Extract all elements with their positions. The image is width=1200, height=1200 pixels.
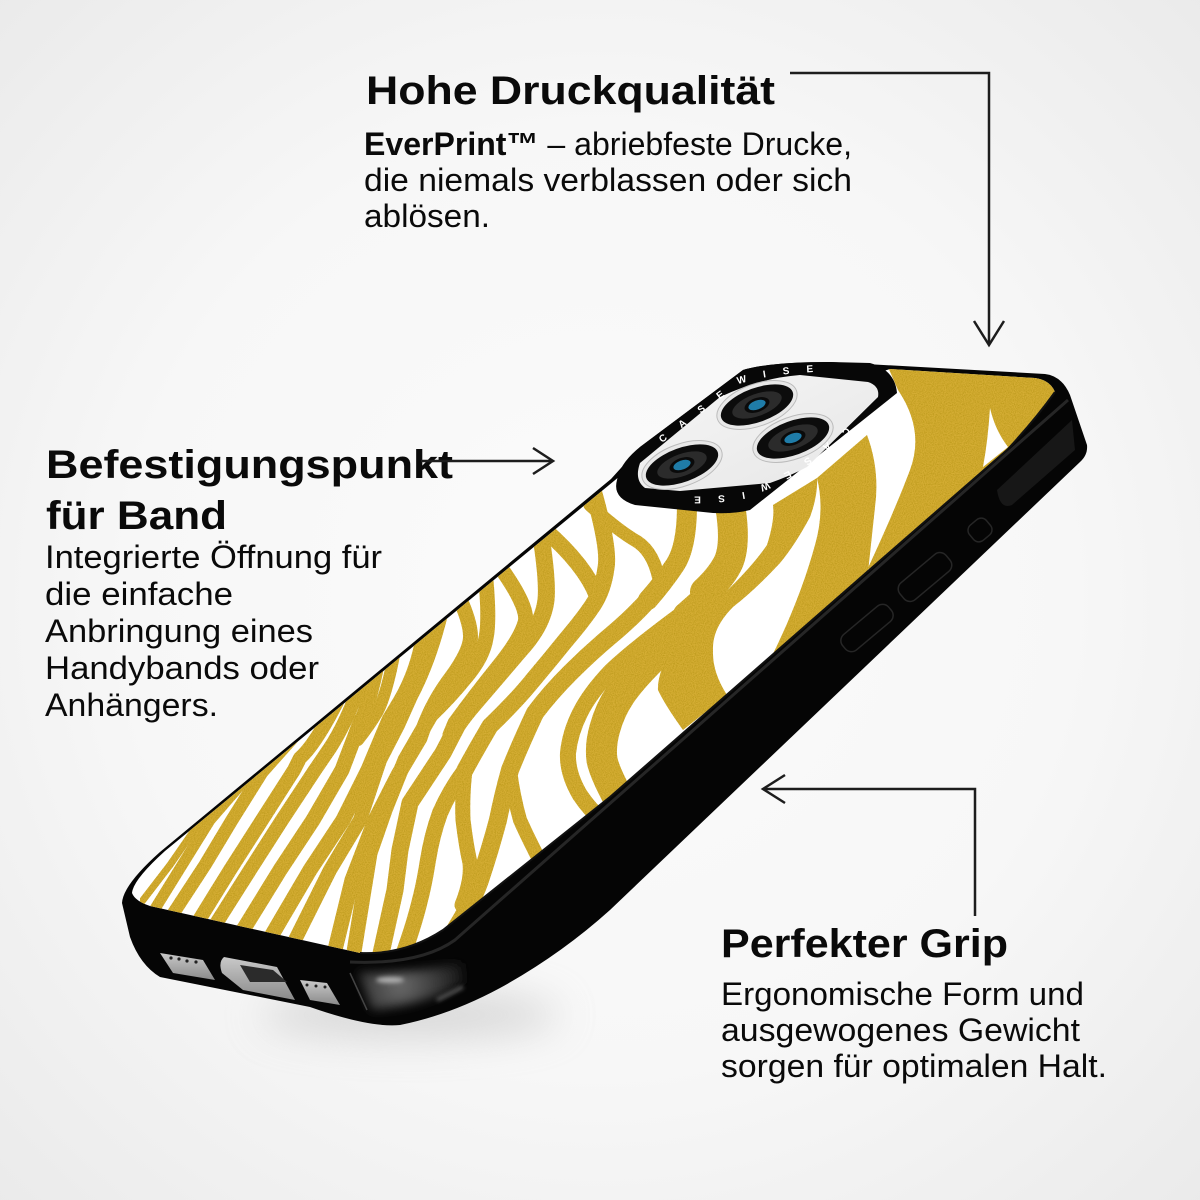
heading: Befestigungspunkt für Band [46, 443, 453, 538]
arrow: to strap attachment point [421, 448, 553, 474]
arrow: to case side [763, 775, 975, 916]
brand ring text: CASEWISE [659, 365, 813, 442]
text block: EverPrint: die niemals verblassen oder sich [364, 162, 852, 198]
text block: Integrierte Öffnung: Anhängers. [45, 687, 218, 723]
lenses [635, 371, 840, 499]
text block: Ergonomische Form: Ergonomische Form und [721, 976, 1084, 1012]
camera window [638, 375, 878, 491]
charging port and speakers [160, 953, 340, 1005]
phone shadow [260, 991, 560, 1039]
heading: Perfekter Grip: Perfekter Grip [721, 922, 1008, 966]
phone case illustration [122, 362, 1088, 1026]
text block: Integrierte Öffnung: Integrierte Öffnung für [45, 539, 382, 575]
text block: Integrierte Öffnung: Handybands oder [45, 650, 319, 686]
printed back surface: white base [132, 369, 1055, 953]
camera module [616, 362, 897, 514]
text block: Integrierte Öffnung: Anbringung eines [45, 613, 313, 649]
case body [122, 362, 1087, 1025]
side buttons [838, 515, 995, 655]
surface rim [360, 392, 1055, 953]
gold zebra pattern [140, 360, 1070, 958]
text block: Ergonomische Form: sorgen für optimalen Halt. [721, 1048, 1107, 1084]
text block: Integrierte Öffnung [45, 539, 382, 723]
camera bumper [616, 362, 897, 513]
heading: Hohe Druckqualität: Hohe Druckqualität [366, 69, 775, 113]
text block: EverPrint: EverPrint™ – abriebfeste Drucke, [364, 126, 852, 162]
heading: Befestigungspunkt für Band: für Band [46, 494, 227, 538]
heading: Befestigungspunkt für Band: Befestigungspunkt [46, 443, 453, 487]
brand ring text: CASEWISE [694, 428, 850, 504]
white spike [983, 408, 1008, 467]
arrow: to back print [790, 73, 1004, 345]
text block: EverPrint: ablösen. [364, 198, 490, 234]
brand ring text [659, 365, 850, 504]
text block: Ergonomische Form [721, 976, 1107, 1084]
text block: EverPrint [364, 126, 852, 234]
text block: Ergonomische Form: ausgewogenes Gewicht [721, 1012, 1080, 1048]
text block: Integrierte Öffnung: die einfache [45, 576, 233, 612]
